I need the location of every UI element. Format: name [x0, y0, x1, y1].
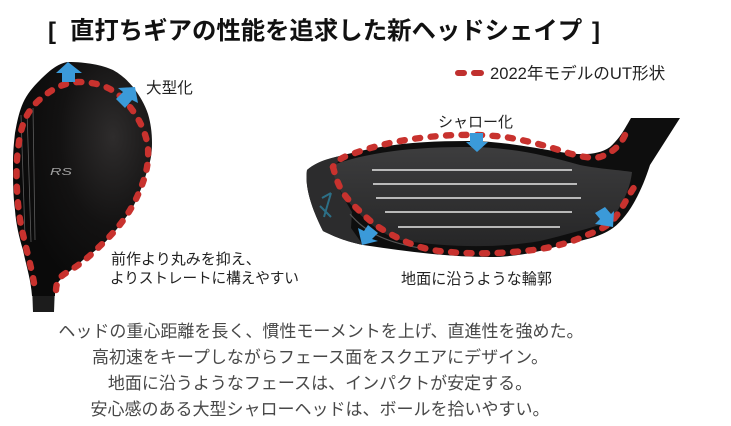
description text: 地面に沿うようなフェースは、インパクトが安定する。	[108, 374, 532, 393]
arrow: up-right	[116, 87, 138, 108]
legend: 2022 model outline: 2022年モデルのUT形状	[490, 63, 666, 83]
label: larger head: 大型化	[146, 79, 193, 97]
arrow: up	[56, 62, 82, 82]
arrow: down	[466, 133, 488, 152]
label: ground-following outline: 地面に沿うような輪郭	[401, 271, 552, 288]
description text	[58, 322, 584, 419]
hosel	[32, 285, 55, 312]
X logo	[320, 193, 331, 217]
description text: ヘッドの重心距離を長く、慣性モーメントを上げ、直進性を強めた。	[58, 322, 584, 341]
face	[333, 147, 632, 246]
note: straighter shape: 前作より丸みを抑え、	[111, 251, 261, 268]
red dashed outline	[333, 167, 638, 253]
note: straighter shape: よりストレートに構えやすい	[110, 270, 299, 287]
note: straighter shape	[110, 251, 299, 287]
title: [	[48, 18, 56, 45]
arrow: down-right	[595, 207, 614, 227]
body	[306, 118, 680, 257]
description text: 高初速をキープしながらフェース面をスクエアにデザイン。	[92, 347, 548, 367]
description text: 安心感のある大型シャローヘッドは、ボールを拾いやすい。	[90, 400, 550, 419]
club head: face view	[306, 118, 680, 257]
red dashed outline	[17, 82, 148, 291]
crown	[13, 62, 152, 296]
title: ]	[592, 18, 600, 45]
label: shallower: シャロー化	[438, 114, 513, 131]
title: 直打ちギアの性能を追求した新ヘッドシェイプ	[70, 18, 582, 45]
club head: top view	[13, 62, 152, 312]
RS logo: RS	[50, 167, 72, 178]
toe	[306, 155, 363, 245]
sole edge	[350, 214, 420, 248]
crown crease lines	[21, 108, 35, 242]
score lines	[372, 170, 581, 227]
arrow: down-left	[358, 225, 378, 245]
